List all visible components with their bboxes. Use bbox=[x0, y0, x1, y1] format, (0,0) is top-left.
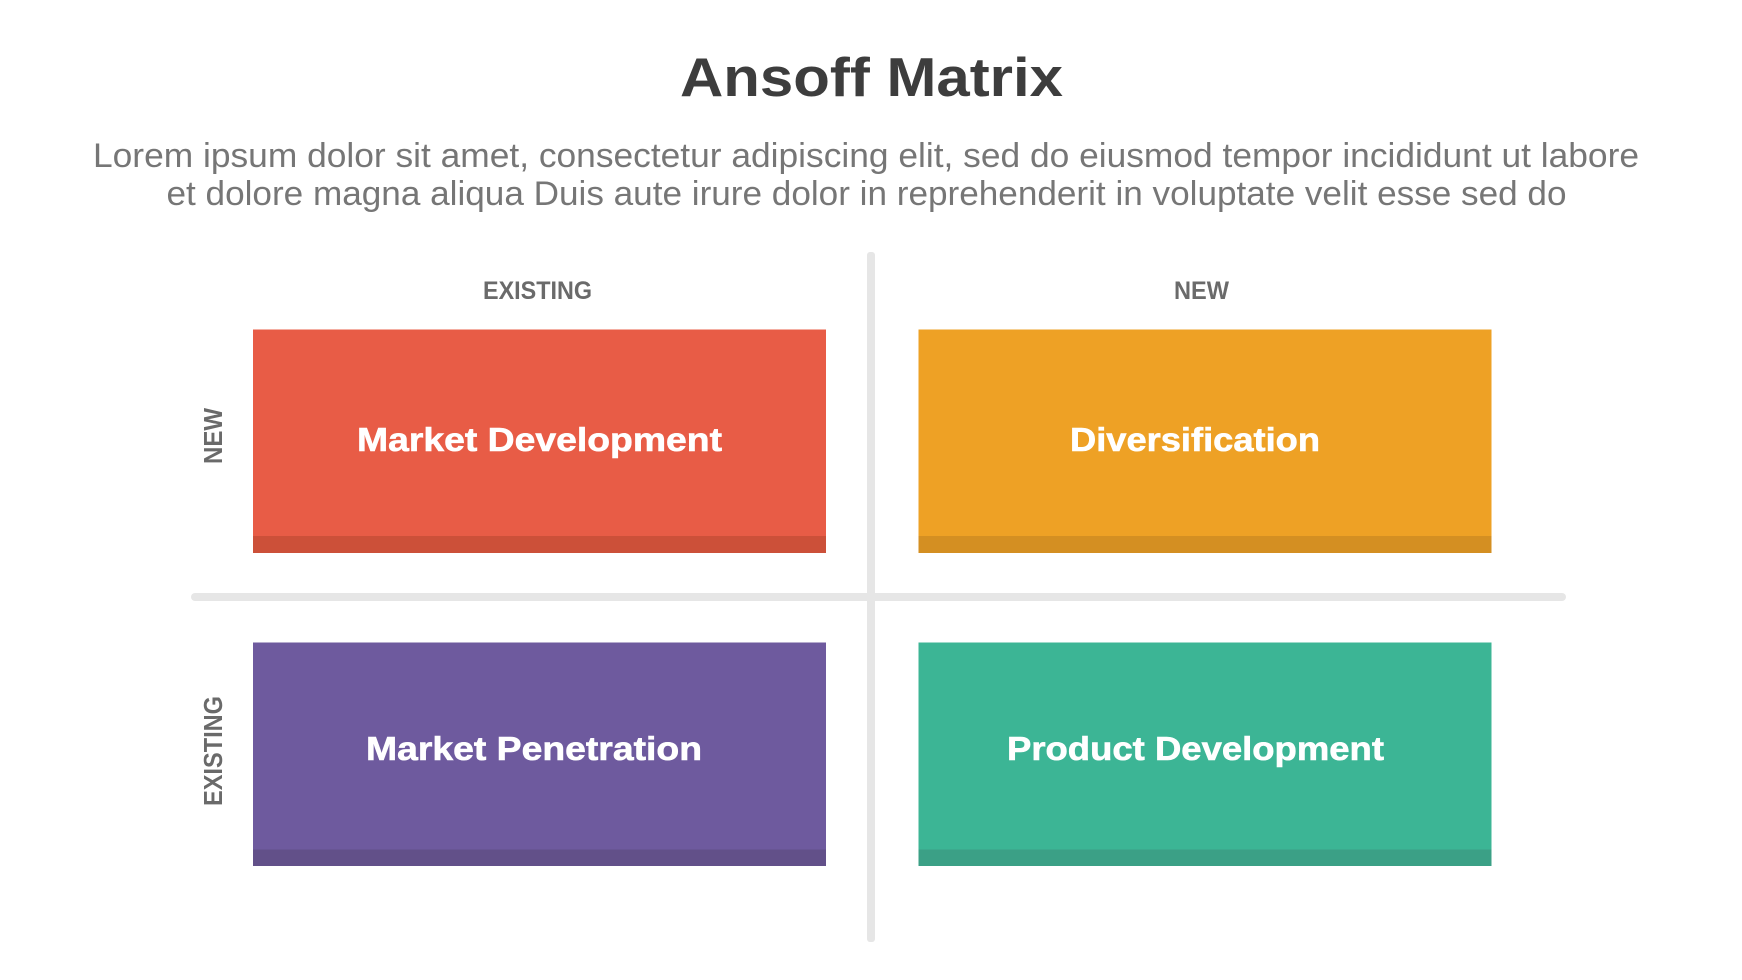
label: product development: Product Development bbox=[1007, 730, 1384, 767]
label: market development: Market Development bbox=[357, 421, 722, 458]
row heading: existing: EXISTING bbox=[198, 696, 228, 806]
column heading: new: NEW bbox=[1174, 277, 1229, 305]
horizontal axis line bbox=[191, 593, 1566, 601]
subtitle text block bbox=[93, 137, 1639, 213]
label: diversification: Diversification bbox=[1070, 421, 1320, 458]
panel: market development bbox=[253, 330, 826, 553]
label: market penetration: Market Penetration bbox=[366, 730, 702, 767]
panel: product development bbox=[918, 642, 1492, 866]
title: Ansoff Matrix bbox=[680, 46, 1063, 108]
panel: diversification bbox=[918, 330, 1492, 553]
panel: market penetration bbox=[253, 642, 826, 866]
vertical axis line bbox=[867, 252, 875, 942]
subtitle text block: et dolore magna aliqua Duis aute irure dolor in reprehenderit in voluptate velit esse sed do bbox=[166, 175, 1566, 213]
row heading: new: NEW bbox=[198, 408, 228, 464]
column heading: existing: EXISTING bbox=[483, 277, 592, 305]
subtitle text block: Lorem ipsum dolor sit amet, consectetur adipiscing elit, sed do eiusmod tempor incididunt ut labore bbox=[93, 137, 1639, 175]
